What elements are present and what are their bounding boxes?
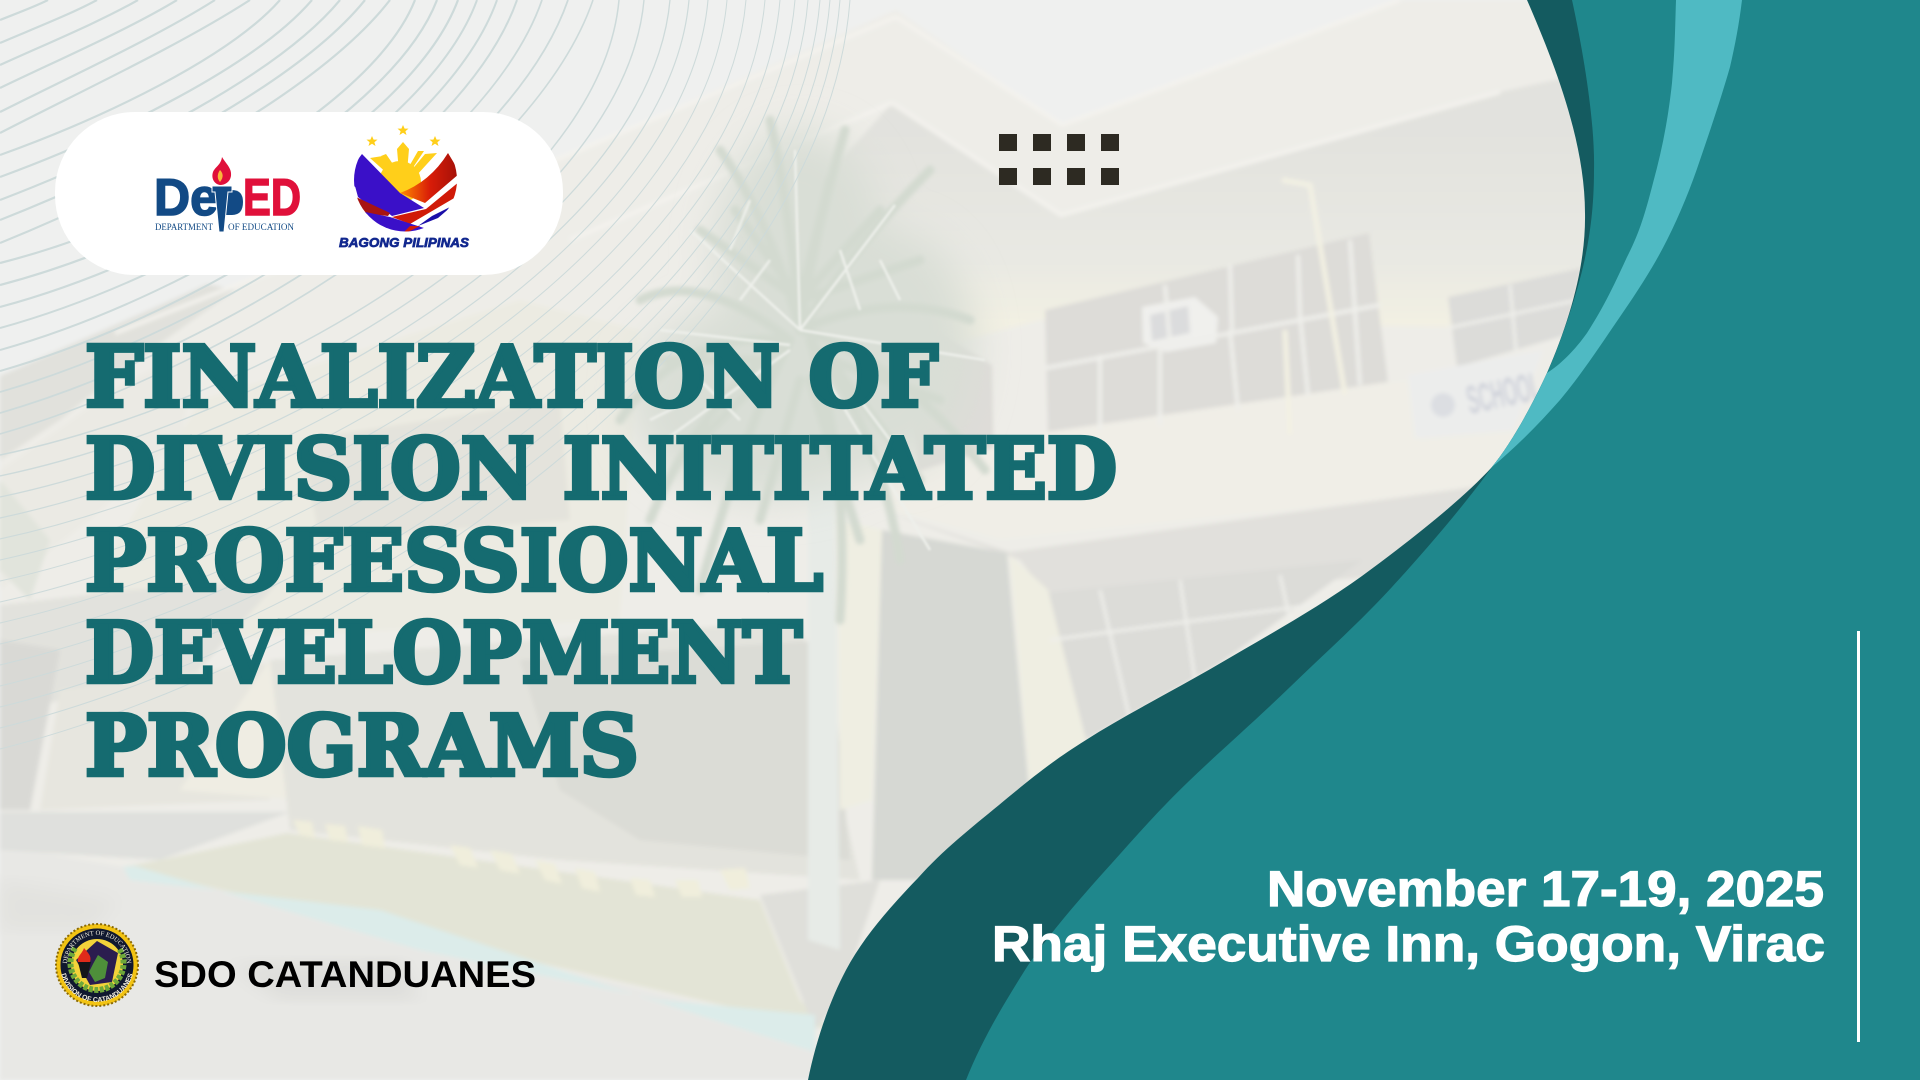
date and venue: Rhaj Executive Inn, Gogon, Virac: [992, 916, 1825, 972]
dark entry and shrubs: [872, 530, 1030, 880]
dark teal swoosh: [808, 0, 1920, 1080]
title: PROFESSIONAL: [85, 512, 823, 610]
division seal: DEPARTMENT OF EDUCATION: [62, 930, 132, 964]
vertical white line: [1857, 631, 1860, 1042]
building edge lines: [115, 0, 1500, 333]
palm fronds: [620, 120, 985, 620]
title: FINALIZATION OF: [85, 328, 938, 426]
lower left garden and garage: [270, 620, 860, 880]
school sign: [1408, 350, 1543, 438]
light teal ribbon: [1492, 0, 1742, 467]
left wing roof band: [0, 284, 235, 460]
date and venue: [992, 861, 1825, 972]
logo pill: [55, 112, 563, 275]
road: [0, 845, 820, 1080]
soffit under the roof: [760, 70, 1600, 350]
left wing mid tones: [60, 300, 640, 640]
division seal: DIVISION OF CATANDUANES: [61, 973, 132, 1002]
logo: DepED: OF EDUCATION: [228, 222, 295, 232]
lawn: [123, 833, 830, 1030]
date and venue: November 17-19, 2025: [1267, 861, 1824, 917]
logo: DepED: De: [154, 169, 218, 227]
title: PROGRAMS: [85, 697, 639, 795]
palm trunk: [808, 480, 840, 950]
dots grid: [999, 134, 1119, 185]
logo: DepED: DEPARTMENT: [155, 222, 213, 232]
cream column: [838, 520, 882, 810]
decorative fan of curved lines: [0, 0, 850, 749]
lower wall band under windows: [890, 380, 1530, 540]
organisation name: SDO CATANDUANES: [154, 954, 536, 995]
title: DEVELOPMENT: [85, 604, 802, 702]
division seal: [55, 923, 139, 1007]
logo: DepED: [154, 157, 301, 232]
logo: Bagong Pilipinas: BAGONG PILIPINAS: [339, 235, 469, 250]
palm crown haze: [630, 130, 975, 500]
title: DIVISION INITITATED: [85, 420, 1117, 518]
left wing palm: [0, 480, 50, 600]
title: [85, 328, 1117, 795]
logo: DepED: ED: [243, 169, 301, 227]
curb: [123, 866, 815, 1052]
main teal panel: [966, 0, 1920, 1080]
palm highlights: [650, 150, 985, 550]
curb stones: [293, 820, 750, 897]
lower window: [1048, 560, 1362, 740]
logo: Bagong Pilipinas: [339, 125, 469, 250]
lower soffit: [880, 486, 1480, 600]
background photo: washed-out school building: SCHOOL: [1463, 364, 1545, 423]
window frames: [1046, 240, 1380, 430]
main windows: [1045, 233, 1388, 433]
AC unit: [1142, 297, 1218, 352]
